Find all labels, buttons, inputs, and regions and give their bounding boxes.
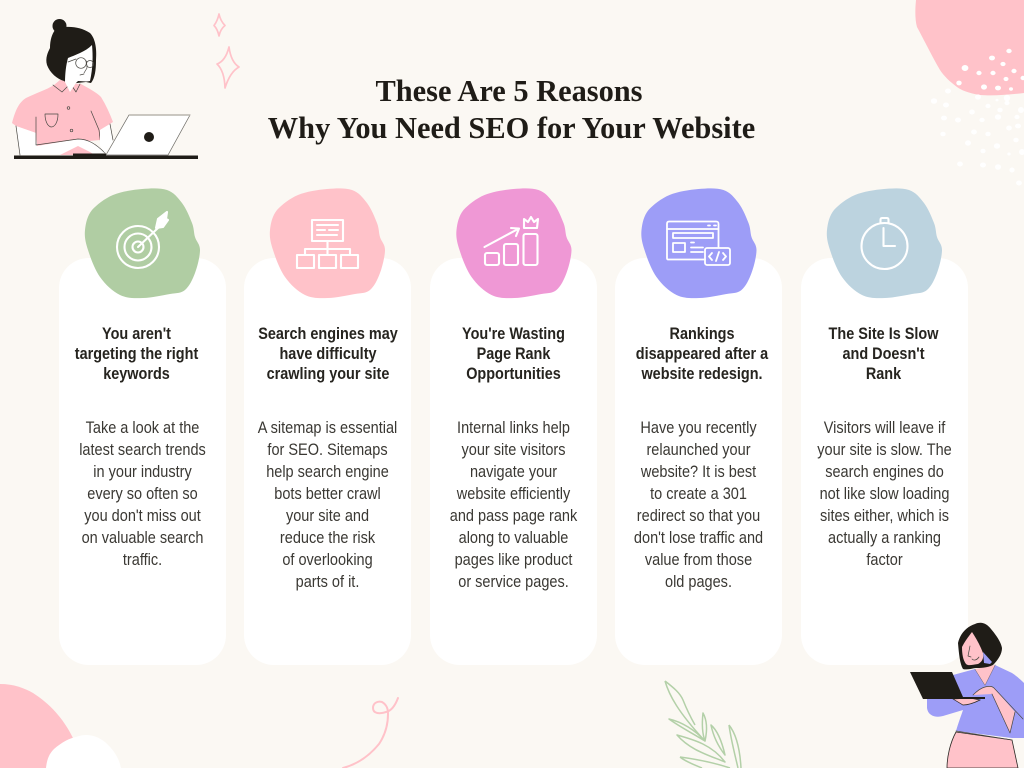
glasses bbox=[76, 58, 86, 68]
body text: not like slow loading bbox=[820, 485, 949, 503]
heading: Rank bbox=[866, 365, 902, 383]
decoration: pink squiggle bbox=[343, 698, 398, 768]
neck bbox=[975, 665, 995, 685]
decoration: bottom left blobs bbox=[0, 684, 121, 768]
body text: traffic. bbox=[123, 551, 162, 569]
heading: website redesign. bbox=[641, 365, 763, 383]
buttons bbox=[67, 107, 70, 109]
body text: search engines do bbox=[825, 463, 944, 481]
illustration: woman with laptop, top left bbox=[12, 19, 198, 159]
heading: Opportunities bbox=[466, 365, 561, 383]
face bbox=[65, 45, 93, 92]
icon blob bbox=[827, 188, 942, 298]
heading bbox=[462, 325, 565, 383]
pocket bbox=[45, 114, 58, 127]
body text: help search engine bbox=[266, 463, 389, 481]
body text: old pages. bbox=[665, 573, 732, 591]
icon blob bbox=[456, 188, 572, 298]
decoration: top right pink blob with dots bbox=[915, 0, 1024, 186]
decoration: green leaves bbox=[665, 681, 741, 768]
hair bbox=[52, 19, 66, 33]
body text: or service pages. bbox=[458, 573, 569, 591]
heading: Page Rank bbox=[477, 345, 551, 363]
ear bbox=[983, 652, 992, 664]
icon: stopwatch bbox=[862, 218, 908, 269]
laptop bbox=[910, 672, 985, 699]
shirt bbox=[12, 80, 113, 146]
panel: redesign bbox=[615, 188, 782, 665]
body text: pages like product bbox=[455, 551, 573, 569]
icon: growth chart with crown bbox=[484, 217, 538, 265]
heading: disappeared after a bbox=[636, 345, 769, 363]
icon blob bbox=[641, 188, 756, 298]
body text: factor bbox=[866, 551, 903, 569]
body text: redirect so that you bbox=[637, 507, 760, 525]
body text: website efficiently bbox=[456, 485, 570, 503]
icon: target bbox=[117, 212, 168, 268]
heading: Rankings bbox=[670, 325, 734, 343]
body text: navigate your bbox=[470, 463, 557, 481]
heading bbox=[258, 325, 398, 383]
card bbox=[801, 258, 968, 665]
panel: keywords bbox=[59, 188, 226, 665]
body text: website? It is best bbox=[640, 463, 757, 481]
body text bbox=[79, 419, 206, 569]
body text: your site and bbox=[286, 507, 369, 525]
body text: don't lose traffic and bbox=[634, 529, 763, 547]
collar bbox=[53, 84, 80, 92]
heading bbox=[829, 325, 939, 383]
body text: on valuable search bbox=[82, 529, 203, 547]
heading: You aren't bbox=[102, 325, 171, 343]
body text: every so often so bbox=[87, 485, 198, 503]
left arm bbox=[16, 126, 105, 155]
body text: in your industry bbox=[93, 463, 192, 481]
heading: You're Wasting bbox=[462, 325, 565, 343]
body text: you don't miss out bbox=[84, 507, 201, 525]
heading: and Doesn't bbox=[842, 345, 925, 363]
body text: your site is slow. The bbox=[817, 441, 952, 459]
body text: value from those bbox=[645, 551, 752, 569]
pink shirt piece at table bbox=[60, 146, 95, 155]
hands and arm bbox=[953, 698, 980, 705]
body text bbox=[817, 419, 952, 569]
body text: Have you recently bbox=[640, 419, 757, 437]
body text: A sitemap is essential bbox=[258, 419, 397, 437]
body text: for SEO. Sitemaps bbox=[267, 441, 388, 459]
body text: along to valuable bbox=[459, 529, 568, 547]
body text: your site visitors bbox=[461, 441, 566, 459]
body text: Take a look at the bbox=[86, 419, 199, 437]
title bbox=[268, 74, 755, 145]
panel: slow site bbox=[801, 188, 968, 665]
card bbox=[59, 258, 226, 665]
panel: page rank bbox=[430, 188, 597, 665]
heading: crawling your site bbox=[267, 365, 390, 383]
laptop bbox=[106, 115, 190, 155]
body text: of overlooking bbox=[282, 551, 373, 569]
body text bbox=[634, 419, 763, 591]
icon blob bbox=[85, 188, 200, 298]
heading: targeting the right bbox=[75, 345, 198, 363]
icon: browser code bbox=[667, 222, 730, 265]
right arm bbox=[100, 124, 113, 153]
body text: bots better crawl bbox=[274, 485, 381, 503]
card bbox=[430, 258, 597, 665]
body text: reduce the risk bbox=[280, 529, 375, 547]
body text: sites either, which is bbox=[820, 507, 949, 525]
body text: parts of it. bbox=[296, 573, 359, 591]
card bbox=[244, 258, 411, 665]
sparkles bbox=[214, 14, 239, 88]
body text: to create a 301 bbox=[650, 485, 747, 503]
icon: sitemap bbox=[297, 220, 358, 268]
panel: crawling bbox=[244, 188, 411, 665]
title: These Are 5 Reasons bbox=[375, 74, 643, 108]
body text: Internal links help bbox=[457, 419, 570, 437]
heading: have difficulty bbox=[279, 345, 377, 363]
illustration: woman holding laptop, bottom right bbox=[910, 623, 1024, 768]
heading: Search engines may bbox=[258, 325, 398, 343]
body text: relaunched your bbox=[646, 441, 751, 459]
heading bbox=[636, 325, 769, 383]
card bbox=[615, 258, 782, 665]
skirt bbox=[947, 732, 1018, 768]
shirt bbox=[927, 665, 1024, 738]
heading: The Site Is Slow bbox=[829, 325, 939, 343]
body text: latest search trends bbox=[79, 441, 206, 459]
body text: actually a ranking bbox=[828, 529, 941, 547]
body text bbox=[450, 419, 577, 591]
face bbox=[962, 632, 983, 665]
table bbox=[14, 156, 198, 159]
body text bbox=[258, 419, 397, 591]
body text: Visitors will leave if bbox=[824, 419, 946, 437]
hair bbox=[958, 623, 1002, 669]
heading: keywords bbox=[103, 365, 170, 383]
icon blob bbox=[270, 188, 385, 298]
heading bbox=[75, 325, 198, 383]
title: Why You Need SEO for Your Website bbox=[268, 111, 755, 145]
body text: and pass page rank bbox=[450, 507, 577, 525]
